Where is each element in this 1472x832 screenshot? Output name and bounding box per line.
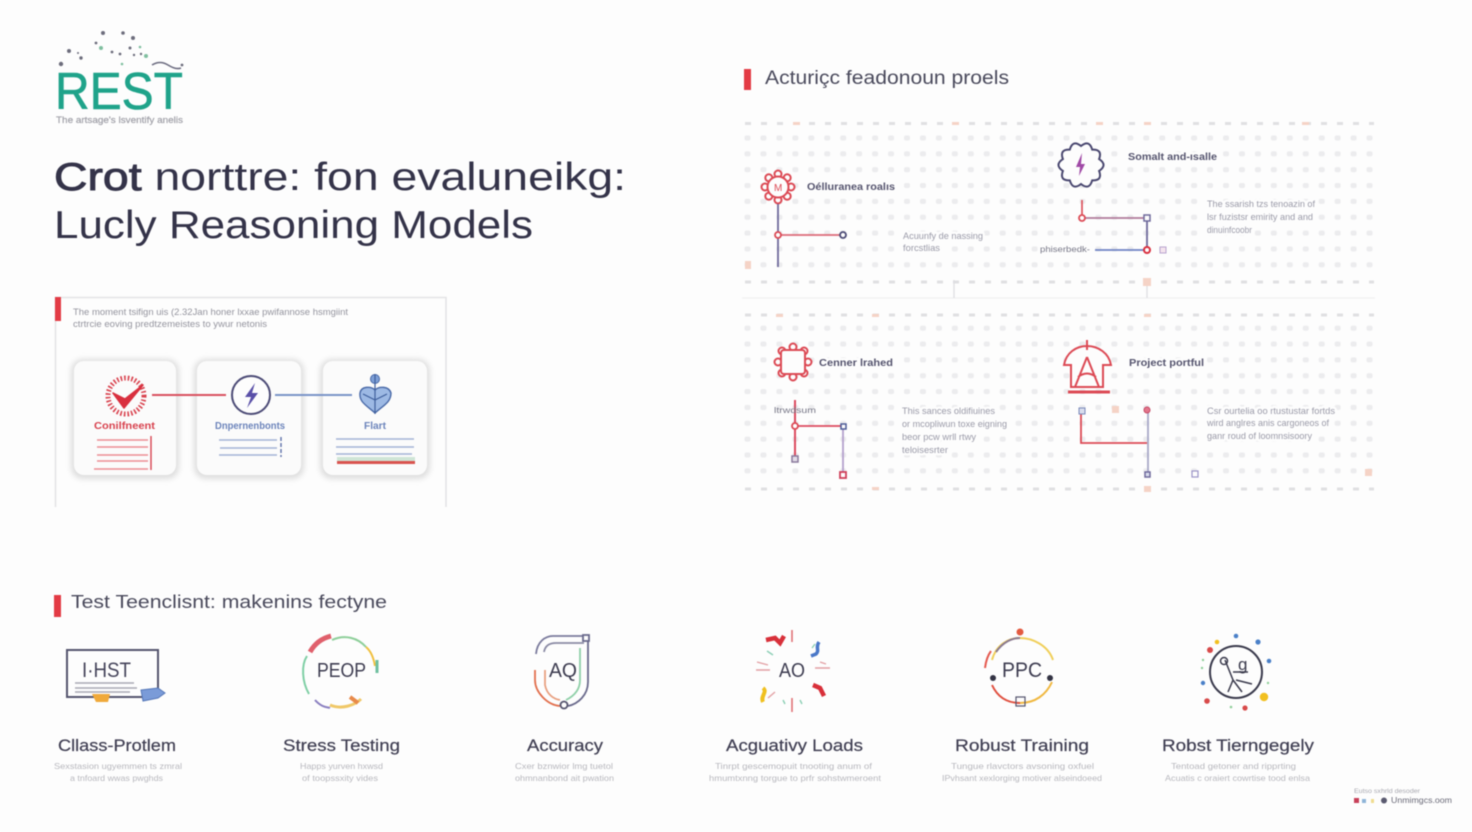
bottom heading (54, 592, 387, 617)
item: Accuracy: Cxer bznwior lmg tuetol (515, 761, 613, 771)
connector: blue (275, 394, 352, 396)
item: Robst Tierngegely: Tentoad getoner and ripprting (1171, 761, 1296, 771)
intro text: The moment tsifign uis (2.32Jan honer lxxae pwifannose hsmgiint (73, 307, 348, 318)
card: dependencies: Dnpernenbonts (215, 421, 285, 432)
model: top-right: dinuinfcoobr (1207, 225, 1252, 236)
icon: red gear: M (774, 183, 782, 194)
model: bottom-right (1064, 340, 1335, 477)
item: Acguativy Loads (709, 630, 882, 783)
icon: PEOP ring: PEOP (317, 660, 366, 682)
icon: PPC ring (985, 628, 1053, 706)
logo: REST (55, 31, 184, 125)
item: Acguativy Loads: Tinrpt gescemopuit tnooting anum of (715, 761, 873, 771)
title: Crot norttre: fon evaluneikg: (54, 156, 626, 199)
item: Accuracy: ohmnanbond ait pwation (515, 773, 614, 783)
card: flart (320, 359, 430, 479)
icon: red square gear (774, 344, 812, 380)
item: Acguativy Loads: hmumtxnng torgue to prfr sohstwmeroent (709, 773, 882, 783)
icon: wavy gear with bolt (1058, 143, 1104, 187)
item: Class-Protlem: Cllass-Protlem (58, 736, 176, 755)
card: dependencies (194, 359, 304, 479)
icon: PEOP ring (303, 636, 377, 708)
card: confirmation: Conilfneent (94, 421, 156, 432)
model: bottom-left (774, 344, 1007, 478)
icon: red temple (1064, 340, 1111, 392)
model: top-left: forcstlias (903, 243, 940, 254)
model: bottom-right: wird anglres anis cargoneos of (1206, 418, 1329, 429)
card: confirmation (71, 359, 179, 479)
model: bottom-left: Cenner lrahed (819, 358, 893, 369)
item: Robust Training: IPvhsant xexlorging motiver alseindoeed (942, 773, 1102, 783)
item: Robst Tierngegely: Robst Tierngegely (1162, 736, 1315, 755)
item: Robst Tierngegely: Acuatis c oraiert cowrtise tood enlsa (1165, 773, 1310, 783)
panel: process overview (55, 297, 446, 507)
model: top-right: phiserbedk- (1040, 245, 1090, 254)
item: Accuracy (515, 635, 614, 783)
model: bottom-left: beor pcw wrll rtwy (902, 432, 976, 443)
right heading: Acturiçc feadonoun proels (765, 68, 1009, 89)
footer credit (1354, 789, 1452, 805)
connector: red (152, 394, 226, 396)
bottom heading: Test Teenclisnt: makenins fectyne (71, 592, 387, 612)
item: Class-Protlem (54, 650, 182, 783)
intro text: ctrtrcie eoving predtzemeistes to ywur netonis (73, 319, 267, 330)
model: bottom-right: ganr roud of loomnsisoory (1207, 431, 1312, 442)
icon: PPC ring: PPC (1002, 659, 1042, 682)
item: Robust Training: Robust Training (955, 736, 1089, 755)
title (54, 156, 626, 247)
icon: circle with dots (1201, 634, 1271, 711)
model: bottom-right: Project portful (1129, 358, 1204, 369)
model: bottom-left: This sances oldifiuines (902, 406, 995, 417)
model: bottom-left: ltrwdsum (774, 405, 816, 415)
model: top-left: Oélluranea roalıs (807, 182, 895, 193)
model: top-right: lsr fuzistsr emirity and and (1207, 212, 1313, 223)
title: Lucly Reasoning Models (54, 204, 533, 247)
model: bottom-left: or mcopliwun toxe eigning (902, 419, 1007, 430)
item: Class-Protlem: Sexstasion ugyemmen ts zmral (54, 761, 182, 771)
model: top-right (1040, 143, 1315, 254)
item: Stress Testing: Stress Testing (283, 736, 400, 755)
panel: dotted model diagrams (742, 122, 1375, 492)
model: bottom-right: Csr ourtelia oo rtustustar fortds (1207, 406, 1335, 417)
model: top-right: The ssarish tzs tenoazin of (1207, 199, 1315, 210)
logo: REST: The artsage's lsventify anelis (56, 115, 184, 125)
icon: AO burst: AO (779, 660, 805, 682)
model: top-left (762, 170, 983, 267)
item: Accuracy: Accuracy (527, 736, 604, 755)
icon: AQ shield (535, 635, 589, 708)
model: top-left: Acuunfy de nassing (903, 231, 983, 242)
item: Robst Tierngegely (1162, 634, 1315, 783)
item: Stress Testing: of toopssxity vides (302, 773, 378, 783)
footer credit: Unmimgcs.oom (1391, 795, 1452, 805)
item: Class-Protlem: a tnfoard wwas pwghds (70, 773, 163, 783)
item: Stress Testing (283, 636, 400, 783)
card: flart: Flart (364, 421, 387, 432)
icon: circle with dots: g (1238, 655, 1247, 674)
icon: red gear (762, 170, 794, 204)
intro text (73, 307, 348, 330)
item: Stress Testing: Happs yurven hxwsd (300, 761, 383, 771)
logo: REST: REST (55, 63, 183, 121)
icon: AQ shield: AQ (549, 660, 577, 682)
icon: whiteboard: I·HST (82, 659, 131, 682)
icon: AO burst (756, 630, 830, 712)
item: Acguativy Loads: Acguativy Loads (726, 736, 863, 755)
item: Robust Training: Tungue rlavctors avsoning oxfuel (951, 761, 1094, 771)
item: Robust Training (942, 628, 1102, 783)
footer credit: Eutso sxhrld desoder (1354, 789, 1420, 795)
model: bottom-left: teloisesrter (902, 445, 948, 456)
model: top-right: Somalt and-ısalle (1128, 152, 1217, 163)
